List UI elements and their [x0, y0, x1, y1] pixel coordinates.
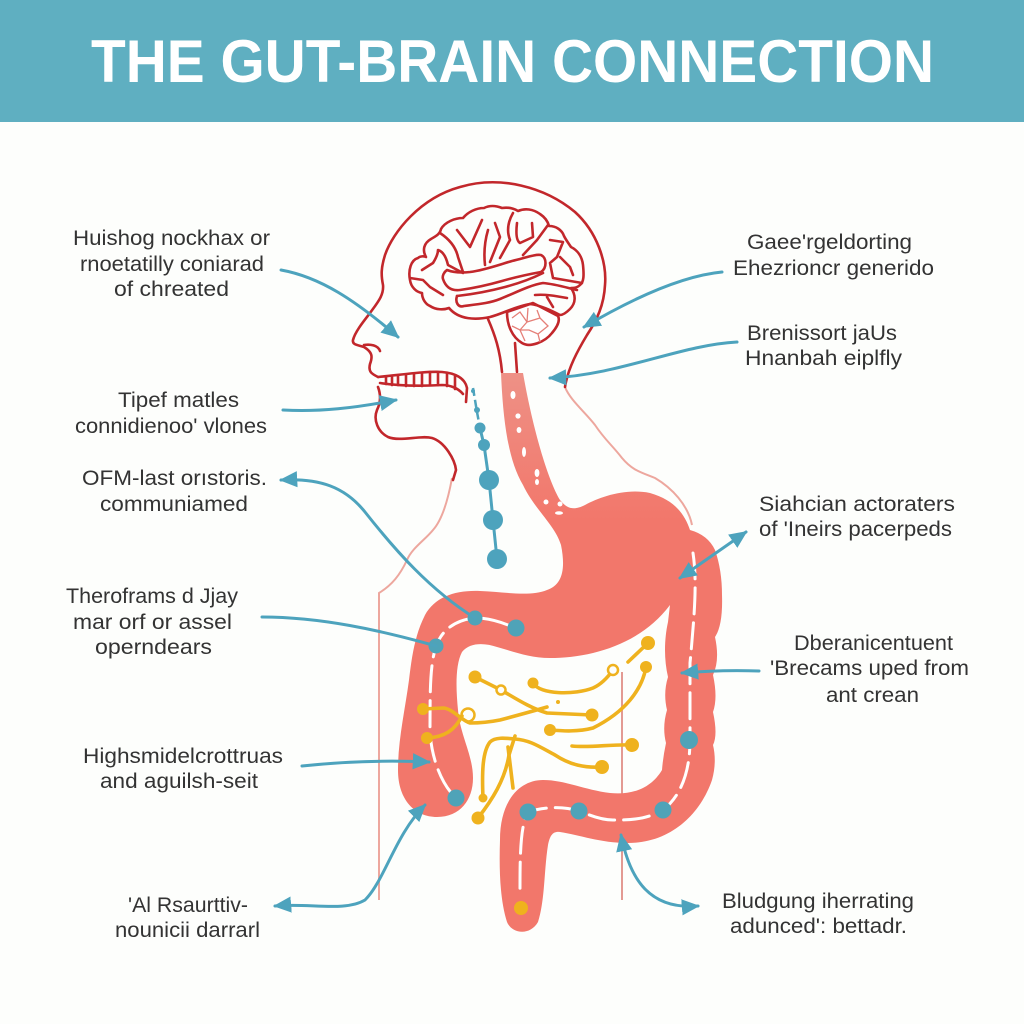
mouth and teeth: [378, 372, 467, 402]
arrow: double stomach: [680, 532, 746, 578]
label 2: connidienoo' vlones: [75, 415, 267, 438]
nostril: [364, 345, 380, 351]
digestive tract: esophagus, stomach, intestines: [398, 373, 722, 932]
lower temporal fold: [456, 283, 577, 306]
head lower outline: chin and neck: [376, 387, 456, 480]
label 4: operndears: [95, 636, 212, 659]
label 6: [115, 894, 260, 942]
head outline: [353, 182, 605, 387]
label 6: nounicii darrarl: [115, 919, 260, 942]
arrow: label to nose: [281, 270, 398, 337]
label 7: Gaee'rgeldorting: [747, 231, 912, 254]
arrow: label to duodenum node: [262, 617, 436, 646]
label 11: adunced': bettadr.: [730, 915, 907, 938]
label 10: Dberanicentuent: [794, 632, 953, 655]
label 4: Theroframs d Jjay: [66, 585, 239, 608]
brain stem: [488, 319, 517, 372]
esophagus white markers: [510, 391, 563, 515]
label 10: 'Brecams uped from: [770, 657, 969, 680]
arrow: label to neck: [550, 342, 737, 378]
label 5: [83, 745, 283, 793]
arrow: double curved: [275, 805, 425, 906]
blue nodes on intestine: [428, 610, 698, 820]
label 4: mar orf or assel: [73, 611, 232, 634]
label 2: [75, 389, 267, 438]
yellow nerve network: [417, 636, 655, 915]
label 1: Huishog nockhax or: [73, 227, 270, 250]
arrow: label to jaw: [283, 400, 396, 411]
label 7: Ehezrioncr generido: [733, 257, 934, 280]
cerebral folds: [410, 213, 582, 307]
label 5: and aguilsh-seit: [100, 770, 258, 793]
label 11: [722, 890, 914, 938]
label 10: [770, 632, 969, 707]
header banner: [0, 0, 1024, 122]
vagus nerve chain: [471, 388, 507, 569]
arrows: [262, 270, 759, 906]
arrow: node to label: [281, 480, 475, 618]
label 3: communiamed: [100, 493, 248, 516]
right labels: [722, 231, 969, 938]
body outline: pink lines: [379, 387, 692, 900]
label 9: [759, 493, 955, 541]
label 3: OFM-last orıstoris.: [82, 467, 267, 490]
intestine dashed flow lines: [430, 553, 695, 890]
brain: [409, 206, 584, 372]
label 8: Hnanbah eiplfly: [745, 347, 903, 370]
left labels: [66, 227, 283, 942]
label 4: [66, 585, 239, 659]
upper temporal fold: [443, 255, 546, 290]
label 2: Tipef matles: [118, 389, 239, 412]
arrow: label to back of head: [584, 272, 722, 327]
label 3: [82, 467, 267, 516]
label 1: [73, 227, 270, 301]
label 8: Brenissort jaUs: [747, 322, 897, 345]
label 11: Bludgung iherrating: [722, 890, 914, 913]
label 9: Siahcian actoraters: [759, 493, 955, 516]
arrow: colon to label: [621, 835, 698, 906]
label 8: [745, 322, 903, 370]
cerebrum outline: [409, 206, 584, 319]
label 10: ant crean: [826, 684, 919, 707]
label 6: 'Al Rsaurttiv-: [128, 894, 248, 917]
cerebellum: [507, 303, 559, 345]
title: THE GUT-BRAIN CONNECTION: [91, 28, 934, 95]
label 1: of chreated: [114, 278, 229, 301]
arrow: label to small intestine: [302, 761, 429, 766]
arrow: label to colon: [682, 671, 759, 673]
label 5: Highsmidelcrottruas: [83, 745, 283, 768]
label 7: [733, 231, 934, 280]
label 1: rnoetatilly coniarad: [80, 253, 264, 276]
label 9: of 'Ineirs pacerpeds: [759, 518, 952, 541]
